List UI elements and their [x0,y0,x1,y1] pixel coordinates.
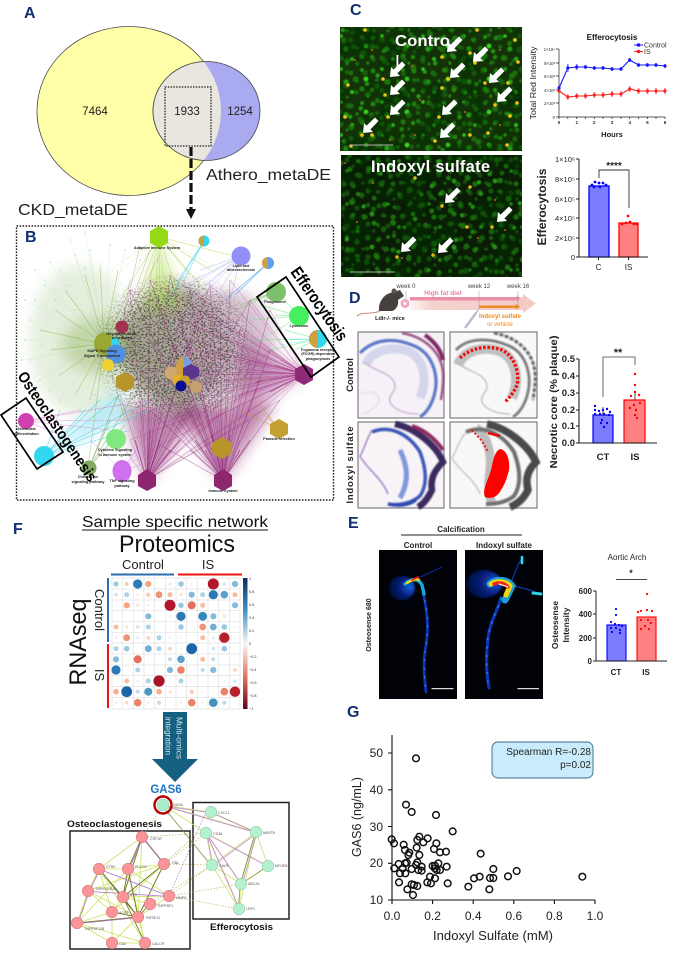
bar chart: aortic arch: CT [611,668,621,677]
heading Sample specific network: Sample specific network [82,514,269,531]
correlation colour bar: 0.6 [249,603,254,607]
bar chart: efferocytosis: 8×10⁵ [555,175,575,184]
panel letter D: D [349,290,361,307]
line chart: total red intensity: 0 [558,120,561,125]
heading Proteomics: Proteomics [119,531,235,558]
gene labels: TNFRSF11A [95,887,116,891]
label Osteoclastogenesis: Osteoclastogenesis [67,819,162,829]
image title Control [396,35,450,67]
correlation colour bar: −1 [249,707,253,711]
node labels: Chemokine [78,475,98,479]
line chart: total red intensity: Efferocytosis [587,33,638,42]
node labels: Cytokine Signaling [98,448,133,452]
label Control: Control [404,541,432,550]
label Athero_metaDE: Athero_metaDE [206,167,331,184]
gene labels: GAS6 [173,803,183,807]
bar chart: necrotic core [549,336,657,468]
network edges [77,805,269,943]
scatter axes: 10 [370,893,383,907]
callout: Efferocytosis box [257,263,352,377]
node labels: TNF signaling [109,479,135,483]
line chart: total red intensity: 4×10³ [544,88,556,93]
icon: mouse with donut [357,288,410,316]
peripheral gene nodes [22,232,140,410]
row label RNAseq: RNAseq [65,598,92,686]
bar chart: aortic arch: Intensity [561,607,571,642]
correlation colour bar: 0.4 [249,616,254,620]
node labels: atherosclerosis [227,268,255,272]
node labels: Immune System [208,489,238,493]
panel E: calcification imaging [348,515,667,699]
correlation colour bar: −0.2 [249,655,256,659]
bar chart: necrotic core: CT [597,452,610,463]
arrow from Venn to network [186,147,196,219]
image title Control: Contro [395,33,450,50]
gene labels: CSF1R [150,837,162,841]
bar chart: efferocytosis [535,155,648,272]
value 7464: 7464 [82,106,108,118]
micrograph: control necrotic core mask [450,332,537,418]
line chart: total red intensity: Hours [601,130,623,139]
node labels: Osteoclast [16,427,36,431]
study timeline [375,284,536,328]
arrow: multi-omics integration: Multi-omics [174,717,184,759]
bar chart: efferocytosis: 2×10⁵ [555,234,575,243]
scan: control aorta [379,550,457,699]
bar chart: aortic arch: 400 [579,610,593,619]
bar chart: necrotic core: 0.2 [562,405,575,416]
panel C: efferocytosis imaging and charts [340,2,667,283]
bar chart: necrotic core: Necrotic core (% plaque) [549,336,560,468]
panel letter C: C [350,2,362,19]
dotted selection square [165,87,211,146]
node labels: Phagosome [264,300,286,304]
rotated label Osteosense 680: Osteosense 680 [366,598,373,652]
study timeline: week 0 [395,284,416,290]
gene labels: CTSK [106,865,116,869]
bar chart: necrotic core: 0.0 [562,438,575,449]
bar chart: efferocytosis: 1×10⁶ [555,155,575,164]
correlation colour bar: −0.4 [249,668,256,672]
Venn circle: CKD_metaDE [37,26,221,196]
gene labels: ACP5 [119,911,128,915]
gene labels: SYK [130,893,138,897]
scatter axes: 1.0 [587,909,604,923]
correlation colour bar: 0.2 [249,629,254,633]
line chart: total red intensity: 6×10³ [544,74,556,79]
bar chart: aortic arch: 600 [579,587,593,596]
panel F: sample specific network [13,514,289,949]
line chart: total red intensity: 5 [646,120,649,125]
correlation colour bar: −0.6 [249,681,256,685]
bar chart: efferocytosis: C [596,263,602,272]
row label IS: IS [92,669,107,681]
line chart: total red intensity: 2×10³ [544,101,556,106]
micrograph: indoxyl sulfate trichrome [358,422,444,508]
study timeline: week 12 [467,284,491,290]
arrow: multi-omics integration: integration [164,717,172,755]
bar chart: aortic arch: IS [642,668,650,677]
micrograph: control [340,27,522,151]
node labels: signaling pathway [72,480,105,484]
scatter axes: 20 [370,856,383,870]
micrograph: control trichrome [358,332,444,418]
correlation colour bar: 0.8 [249,590,254,594]
efferocytosis nodes [200,806,274,915]
white arrows [401,188,512,253]
pathway hub nodes [18,226,327,491]
osteoclastogenesis nodes [71,831,175,949]
panel letter A: A [24,5,36,22]
node labels: Regulation of ifn- [106,332,138,336]
row label Control: Control [345,358,356,392]
bar chart: aortic arch: 200 [579,634,593,643]
bar chart: aortic arch: 0 [588,657,593,666]
scatter axes [370,735,604,923]
scan: indoxyl sulfate aorta [465,550,543,699]
gene labels: TNFRSF11B [84,927,105,931]
box: efferocytosis cluster [193,802,289,919]
scatter axes: 50 [370,746,383,760]
line chart: total red intensity: Control [644,42,667,50]
network edges [22,232,318,480]
label Indoxyl sulfate: Indoxyl sulfate [476,541,533,550]
line chart: total red intensity: 1 [575,120,578,125]
soft edge density [30,240,304,482]
bar chart: necrotic core: IS [631,452,639,463]
scatter points [388,755,586,898]
scale bar [350,144,393,146]
micrograph: indoxyl sulfate [341,155,531,283]
line chart: total red intensity: Total Red Intensity [529,46,538,120]
row label Indoxyl sulfate: Indoxyl sulfate [345,426,356,504]
panel letter E: E [348,515,359,532]
line chart: total red intensity: 0 [553,115,556,120]
line chart: total red intensity: 8×10³ [544,61,556,66]
scatter axes: 40 [370,783,383,797]
node labels: pathway [114,484,130,488]
node labels: Signal Transduction [84,354,121,358]
scatter axes: 0.0 [384,909,401,923]
study timeline: or vehicle [487,322,513,328]
statistics callout: Spearman R=-0.28 [506,747,591,758]
scatter axes: 30 [370,820,383,834]
study timeline: Indoxyl sulfate [479,314,522,320]
gene labels: TNFRSF1 [157,904,173,908]
Venn overlap [152,61,221,161]
image title Indoxyl sulfate: Indoxyl sulfate [371,158,490,176]
scatter axes: 0.8 [546,909,563,923]
micrograph: indoxyl sulfate necrotic core mask [450,422,537,508]
callout: Efferocytosis box: Efferocytosis [287,263,352,345]
gene labels: CALR [219,864,229,868]
node labels: (FCGR) dependent [301,352,335,356]
panel letter F: F [13,521,23,538]
node GAS6 [154,796,172,814]
gene labels: MERTK [263,831,276,835]
panel B: pathway network [1,226,352,500]
column group bars [111,574,242,576]
panel G: scatter plot [347,704,604,943]
bar chart: efferocytosis: Efferocytosis [535,168,549,246]
scale bar [350,272,395,273]
gene labels: ABCA1 [248,882,260,886]
node labels: Lipid and [233,264,250,268]
correlation colour bar: 1 [249,577,251,581]
bar chart: necrotic core: 0.3 [562,388,575,399]
node labels: Adaptive Immune System [134,246,181,250]
study timeline: week 16 [506,284,530,290]
gene labels: MMP9 [176,896,186,900]
node labels [13,246,336,493]
row group bars [107,578,109,708]
node labels: a-mediated [112,336,133,340]
Venn circle: Athero_metaDE [153,62,260,160]
node labels: MAPK Signaling [87,349,117,353]
value 1254: 1254 [227,106,253,118]
gene labels: CD36 [213,832,222,836]
correlation matrix [111,578,240,709]
line chart: total red intensity: 2 [593,120,596,125]
bar chart: efferocytosis: 6×10⁵ [555,195,575,204]
heading Calcification: Calcification [437,525,485,534]
bar chart: efferocytosis: **** [606,161,622,172]
panel D: atherosclerosis study [345,284,657,508]
gene labels: CALCR [152,942,165,946]
study timeline: Ldlr-/- mice [375,316,405,322]
protein interaction network [67,796,289,949]
node labels: differentiation [13,432,39,436]
node labels: phagocytosis [306,357,330,361]
column label Control: Control [122,557,164,572]
callout: Osteoclastogenesis box: Osteoclastogenesis [14,369,100,485]
x axis label: Indoxyl Sulfate (mM) [433,928,553,943]
gene labels: MFGE8 [275,864,287,868]
bar chart: necrotic core: 0.5 [562,354,576,365]
scatter axes: 0.2 [424,909,441,923]
bar chart: efferocytosis: 4×10⁵ [555,214,575,223]
dotted network frame [16,226,334,500]
correlation colour bar: 0 [249,642,251,646]
bar chart: aortic arch: Aortic Arch [608,553,646,562]
study timeline: High fat diet [424,290,463,297]
gene labels: TNFSF11 [145,916,160,920]
gene labels: PLCG2 [135,865,147,869]
scatter axes: 0.6 [505,909,522,923]
correlation colour bar [243,577,256,711]
label Efferocytosis: Efferocytosis [210,922,273,932]
bar chart: necrotic core: 0.1 [562,421,576,432]
gene labels: LRP1 [246,907,255,911]
gene labels [84,803,287,946]
bar chart: aortic arch: Osteosense [550,601,560,649]
line chart: total red intensity: 4 [628,120,631,125]
gene labels: CXCL1 [218,811,230,815]
value 1933: 1933 [174,106,200,118]
node labels: Fcgamma receptor [301,348,336,352]
label GAS6: GAS6 [150,784,182,796]
label CKD_metaDE: CKD_metaDE [18,202,128,219]
central label cloud [92,272,258,428]
line chart: total red intensity [529,33,667,139]
column label IS: IS [202,557,214,572]
bar chart: necrotic core: 0.4 [562,371,576,382]
arrow: multi-omics integration [152,712,198,782]
bar chart: aortic arch [550,553,667,677]
bar chart: efferocytosis: IS [625,263,632,272]
node labels: Lysosome [290,324,308,328]
correlation colour bar: −0.8 [249,694,256,698]
bar chart: aortic arch: * [629,568,633,578]
scatter axes: 0.4 [465,909,482,923]
white arrows [363,36,512,138]
node labels: Parasite infection [263,437,296,441]
bar chart: efferocytosis: 0 [571,253,575,262]
node labels: in Immune system [98,453,132,457]
statistics callout: p=0.02 [560,760,591,771]
panel letter G: G [347,704,359,721]
panel A: Venn diagram [18,5,331,219]
heading Calcification [401,525,522,536]
line chart: total red intensity: 6 [664,120,667,125]
line chart: total red intensity: IS [644,49,651,56]
line chart: total red intensity: 3 [611,120,614,125]
bar chart: necrotic core: ** [614,347,623,359]
box: osteoclastogenesis cluster [70,831,190,949]
y axis label: GAS6 (ng/mL) [350,777,364,857]
statistics callout [492,742,593,778]
icon: syringe [465,310,478,328]
gene labels: CA2 [119,942,126,946]
panel letter B: B [25,229,37,246]
line chart: total red intensity: 1×10⁴ [544,47,555,52]
gene labels: CBL [172,861,179,865]
row label Control: Control [92,589,107,631]
